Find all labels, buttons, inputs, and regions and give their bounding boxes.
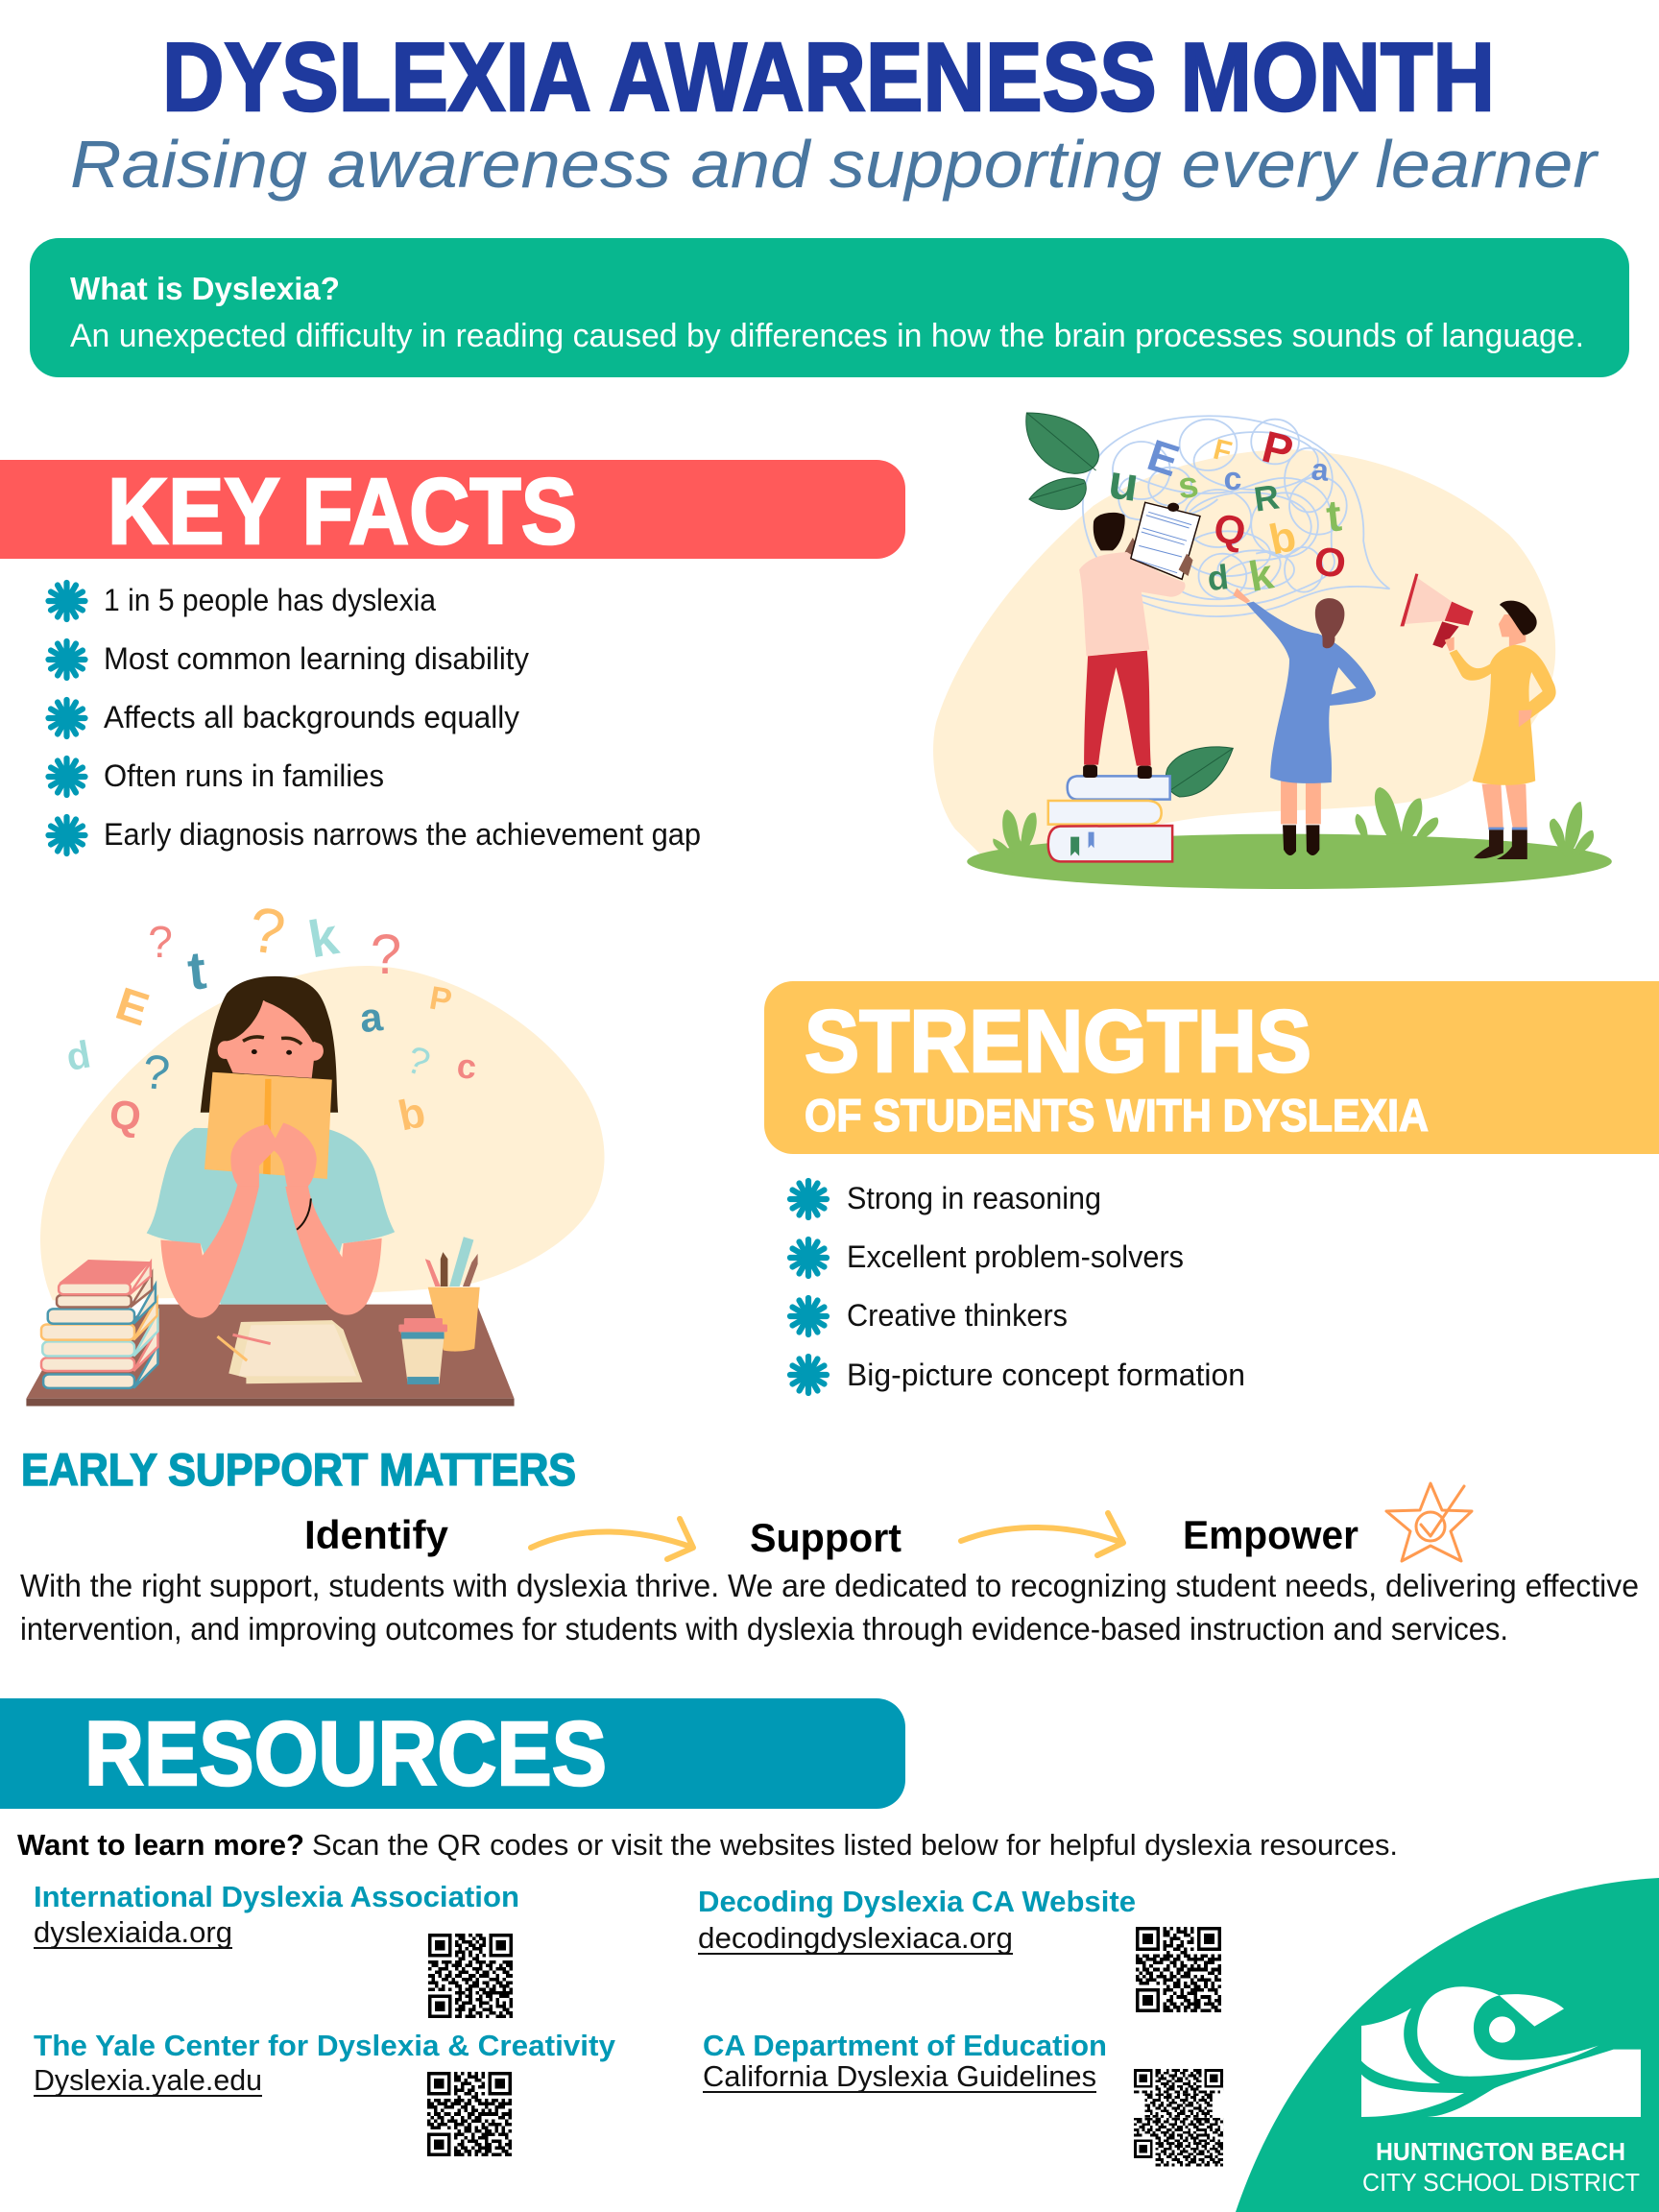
panel: strengths heading: OF STUDENTS WITH DYSLEXIA: [805, 1090, 1429, 1141]
panel: resources heading: [0, 1698, 905, 1809]
resource: international dyslexia association: [34, 1880, 519, 1949]
floating letters: P: [426, 979, 454, 1020]
table: [26, 1305, 515, 1399]
paragraph: early support: [20, 1568, 1639, 1647]
resources intro: Want to learn more?: [17, 1828, 304, 1862]
pencil holder: [425, 1237, 480, 1352]
floating letters: ?: [148, 917, 173, 967]
resource: decoding dyslexia ca: [698, 1885, 1136, 1955]
panel: what is dyslexia: [30, 238, 1629, 377]
fact 2: Most common learning disability: [104, 641, 529, 676]
floating letters: c: [455, 1046, 478, 1087]
floating letters: a: [357, 994, 385, 1041]
qr code 4: [1134, 2069, 1223, 2166]
man with clipboard: [1122, 538, 1146, 560]
leaves: [1026, 413, 1233, 797]
paragraph: early support: With the right support, students with dyslexia thrive. We are dedicated to recognizing student needs, delivering effective: [20, 1568, 1639, 1603]
fact 3: Affects all backgrounds equally: [104, 700, 519, 734]
logo: huntington beach city school district: CITY SCHOOL DISTRICT: [1362, 2168, 1640, 2197]
qr code 3: [429, 2072, 510, 2156]
subtitle: Raising awareness and supporting every learner: [70, 127, 1599, 202]
panel: key facts heading: KEY FACTS: [108, 459, 577, 564]
scribble letters: Q: [1212, 505, 1248, 554]
fact 4: Often runs in families: [104, 758, 384, 793]
floating letters: [63, 893, 478, 1141]
scribble letters: d: [1206, 557, 1231, 598]
fact 5: Early diagnosis narrows the achievement gap: [104, 817, 701, 852]
resource: yale center: [34, 2029, 616, 2097]
scribble letters: b: [1265, 513, 1300, 565]
heading: early support matters: EARLY SUPPORT MATTERS: [21, 1444, 576, 1495]
resource: ca department of education: CA Department of Education: [703, 2029, 1107, 2062]
step: support: Support: [750, 1515, 902, 1560]
step: empower: Empower: [1183, 1512, 1358, 1557]
floating letters: Q: [108, 1092, 143, 1140]
title: DYSLEXIA AWARENESS MONTH: [162, 24, 1495, 132]
illustration: people untangling letters: [933, 413, 1612, 889]
list: key facts: [48, 583, 701, 854]
resource: international dyslexia association: International Dyslexia Association: [34, 1880, 519, 1913]
scribble letters: a: [1310, 451, 1331, 488]
resource: ca department of education: [703, 2029, 1107, 2093]
qr code 2: [1138, 1927, 1219, 2012]
resource: yale center: Dyslexia.yale.edu: [34, 2063, 262, 2097]
panel: key facts heading: [0, 459, 905, 564]
resource: decoding dyslexia ca: decodingdyslexiaca.org: [698, 1921, 1013, 1955]
floating letters: k: [304, 907, 344, 969]
definition text: An unexpected difficulty in reading caused by differences in how the brain processes sounds of language.: [70, 318, 1584, 354]
arrow: identify to support: [531, 1519, 693, 1559]
panel: strengths heading: [764, 981, 1659, 1154]
girl: [201, 976, 338, 1113]
woman with megaphone: [1482, 784, 1527, 829]
floating letters: d: [63, 1033, 94, 1079]
scribble letters: s: [1176, 465, 1200, 507]
stack of books: [41, 1260, 157, 1388]
qr code 1: [428, 1936, 513, 2016]
resource: decoding dyslexia ca: Decoding Dyslexia CA Website: [698, 1885, 1136, 1918]
floating letters: ?: [245, 893, 290, 968]
paragraph: early support: intervention, and improving outcomes for students with dyslexia through evidence-based instruction and services.: [20, 1611, 1508, 1647]
scribble letters: c: [1224, 461, 1241, 497]
step: identify: Identify: [304, 1512, 449, 1557]
scribble letters: F: [1210, 434, 1235, 469]
floating letters: E: [109, 978, 155, 1036]
papers and pens: [228, 1320, 362, 1383]
floating letters: b: [395, 1089, 429, 1141]
scribble letters: P: [1258, 421, 1298, 476]
woman in blue: [1281, 781, 1321, 824]
arrow: support to empower: [961, 1513, 1123, 1555]
list: strengths: [790, 1181, 1245, 1393]
resource: ca department of education: California Dyslexia Guidelines: [703, 2059, 1096, 2093]
fact 1: 1 in 5 people has dyslexia: [104, 583, 436, 617]
scribble letters: t: [1324, 490, 1344, 541]
floating letters: ?: [140, 1045, 173, 1100]
logo text: HUNTINGTON BEACH: [1376, 2137, 1625, 2166]
strength 3: Creative thinkers: [847, 1298, 1068, 1333]
resource: yale center: The Yale Center for Dyslexia & Creativity: [34, 2029, 616, 2062]
books: [1068, 776, 1170, 800]
strength 4: Big-picture concept formation: [847, 1358, 1245, 1392]
resources intro: Scan the QR codes or visit the websites listed below for helpful dyslexia resources.: [312, 1828, 1398, 1862]
logo: huntington beach city school district: [1236, 1878, 1659, 2212]
panel: resources heading: RESOURCES: [84, 1703, 607, 1805]
floating letters: ?: [400, 1038, 435, 1085]
grass: [993, 787, 1594, 857]
illustration: girl reading: [26, 893, 605, 1407]
scribble letters: R: [1252, 477, 1282, 519]
definition heading: What is Dyslexia?: [70, 271, 340, 306]
floating letters: ?: [371, 924, 401, 986]
scribble letters: [1105, 421, 1348, 601]
strength 2: Excellent problem-solvers: [847, 1239, 1184, 1274]
scribble letters: u: [1105, 454, 1142, 512]
icon: star with check: [1386, 1483, 1472, 1561]
floating letters: t: [184, 939, 209, 1001]
coffee cup: [398, 1318, 447, 1384]
logo mark: [1361, 1986, 1641, 2117]
scribble letters: k: [1245, 550, 1277, 601]
scribble letters: E: [1142, 429, 1186, 486]
panel: strengths heading: STRENGTHS: [805, 993, 1311, 1091]
strength 1: Strong in reasoning: [847, 1181, 1101, 1215]
scribble letters: O: [1312, 539, 1348, 587]
resource: international dyslexia association: dyslexiaida.org: [34, 1915, 232, 1949]
